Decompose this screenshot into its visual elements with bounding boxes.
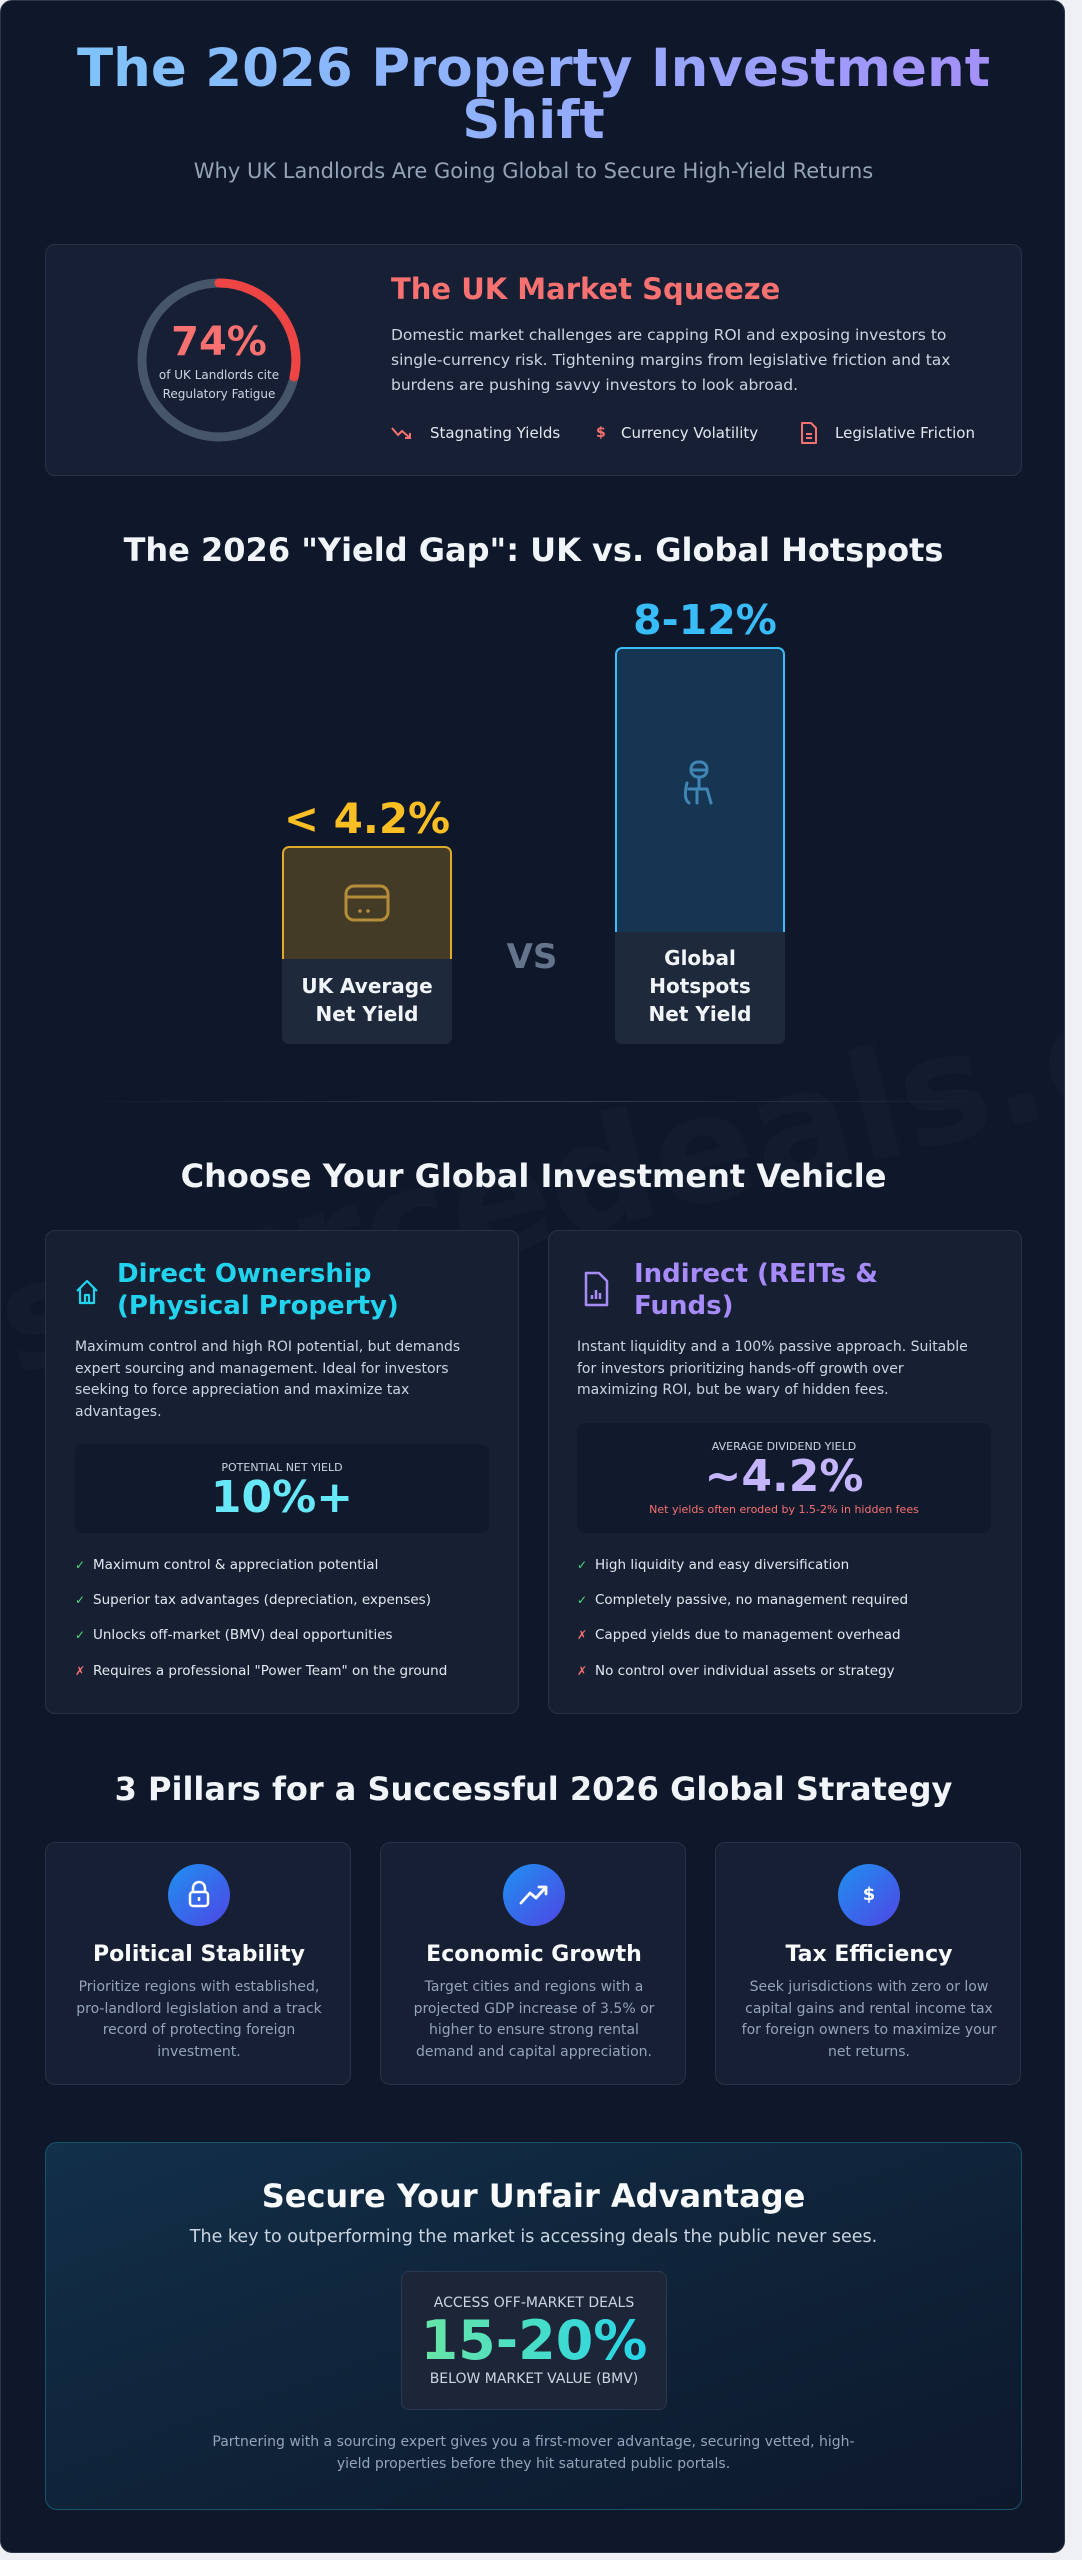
donut chart 74%: 74% [171,319,267,365]
list: pros/cons: ✗ [577,1664,587,1678]
VS label: VS [507,937,557,977]
heading: vehicles: Choose Your Global Investment Vehicle [181,1157,886,1195]
stat box: BMV [401,2271,667,2410]
icon list: challenges: $ [596,425,606,441]
text block: Maximum control and high ROI potential, but demands expert sourcing and management. Ideal for investors seeking to force appreciation and maximize tax advantages. [75,1339,460,1420]
Global value: 8-12% [633,596,777,644]
panel: tax efficiency [715,1842,1021,2085]
panel: CTA unfair advantage [45,2142,1022,2510]
list: pros/cons: ✓ [75,1628,85,1642]
Global bar: Hotspots [649,974,751,998]
Global bar: Global [664,946,736,970]
icon list: challenges: Currency Volatility [621,424,758,442]
stat: dividend yield [577,1423,991,1533]
panel: tax efficiency: Seek jurisdictions with zero or low capital gains and rental income tax for foreign owners to maximize your net returns. [742,1979,996,2060]
icon: trend up [503,1864,565,1926]
heading: Secure Your Unfair Advantage [262,2177,805,2215]
subtitle: Why UK Landlords Are Going Global to Secure High-Yield Returns [194,159,873,183]
list: pros/cons: ✓ [577,1593,587,1607]
icon: globe/plane [684,760,712,805]
donut chart 74% [138,278,300,442]
icon list: challenges [391,422,975,444]
panel: political stability [45,1842,351,2085]
list: pros/cons: ✓ [577,1558,587,1572]
UK bar: UK Average [301,974,433,998]
list: pros/cons [577,1557,908,1679]
Global bar: Net Yield [649,1002,751,1026]
stat: dividend yield: ~4.2% [705,1451,863,1502]
list: pros/cons: Requires a professional "Power Team" on the ground [93,1663,447,1679]
UK bar: Net Yield [316,1002,418,1026]
title: Shift [462,90,605,151]
panel: direct ownership [45,1230,519,1714]
stat: dividend yield: AVERAGE DIVIDEND YIELD [712,1440,856,1453]
icon: dollar: $ [863,1884,875,1905]
stat: potential net yield [75,1444,489,1533]
icon: lock [168,1864,230,1926]
list: pros/cons: Superior tax advantages (depreciation, expenses) [93,1592,431,1608]
heading: Funds) [634,1291,733,1321]
icon: card [344,884,390,922]
stat: potential net yield: POTENTIAL NET YIELD [221,1461,343,1474]
text block: Instant liquidity and a 100% passive approach. Suitable for investors prioritizing hands-off growth over maximizing ROI, but be wary of hidden fees. [577,1339,968,1398]
donut chart 74%: of UK Landlords cite [159,368,279,382]
stat box: BMV: 15-20% [421,2309,647,2372]
list: pros/cons: ✗ [75,1664,85,1678]
stat box: BMV: ACCESS OFF-MARKET DEALS [434,2295,634,2311]
footer text: Partnering with a sourcing expert gives you a first-mover advantage, securing vetted, high-yield properties before they hit saturated public portals. [212,2434,855,2472]
UK bar [282,846,452,1044]
list: pros/cons: Completely passive, no management required [595,1592,908,1608]
panel: indirect REITs [548,1230,1022,1714]
list: pros/cons: ✗ [577,1628,587,1642]
Global bar [615,647,785,1044]
icon list: challenges: Legislative Friction [835,424,975,442]
subtitle: The key to outperforming the market is accessing deals the public never sees. [190,2227,877,2247]
icon list: challenges: Stagnating Yields [430,424,560,442]
heading: (Physical Property) [117,1291,399,1321]
panel: economic growth: Target cities and regions with a projected GDP increase of 3.5% or higher to ensure strong rental demand and capital appreciation. [414,1979,654,2060]
panel: economic growth [380,1842,686,2085]
heading: Indirect (REITs & [634,1259,878,1289]
heading [634,1259,878,1321]
list: pros/cons: Maximum control & appreciation potential [93,1557,378,1573]
panel: economic growth: Economic Growth [426,1942,642,1967]
list: pros/cons: ✓ [75,1593,85,1607]
heading: 3 pillars: 3 Pillars for a Successful 2026 Global Strategy [115,1770,952,1808]
list: pros/cons: Unlocks off-market (BMV) deal opportunities [93,1627,393,1643]
list: pros/cons: ✓ [75,1558,85,1572]
panel: UK market squeeze [45,244,1022,476]
donut chart 74%: Regulatory Fatigue [163,387,275,401]
heading [117,1259,399,1321]
bar chart: yield gap [282,596,785,1044]
icon: dollar [838,1864,900,1926]
stat: potential net yield: 10%+ [211,1472,353,1523]
panel: political stability: Prioritize regions with established, pro-landlord legislation and a track record of protecting foreign investment. [76,1979,322,2060]
text block: Domestic market challenges are capping ROI and exposing investors to single-currency risk. Tightening margins from legislative friction and tax burdens are pushing savvy investors to look abroad. [391,326,950,394]
panel: tax efficiency: Tax Efficiency [786,1942,952,1967]
UK value: < 4.2% [284,794,450,843]
title: The 2026 Property Investment [77,38,990,99]
icon: document chart [584,1272,608,1306]
list: pros/cons [75,1557,447,1679]
heading: Direct Ownership [117,1259,371,1289]
title [1,43,1066,147]
list: pros/cons: No control over individual assets or strategy [595,1663,895,1679]
list: pros/cons: Capped yields due to management overhead [595,1627,901,1643]
panel: political stability: Political Stability [93,1942,305,1967]
stat: dividend yield: Net yields often eroded by 1.5-2% in hidden fees [649,1503,919,1516]
icon: house [76,1280,98,1304]
heading: The UK Market Squeeze [391,272,780,306]
heading: yield gap: The 2026 "Yield Gap": UK vs. Global Hotspots [124,531,943,569]
list: pros/cons: High liquidity and easy diversification [595,1557,849,1573]
stat box: BMV: BELOW MARKET VALUE (BMV) [430,2371,638,2387]
